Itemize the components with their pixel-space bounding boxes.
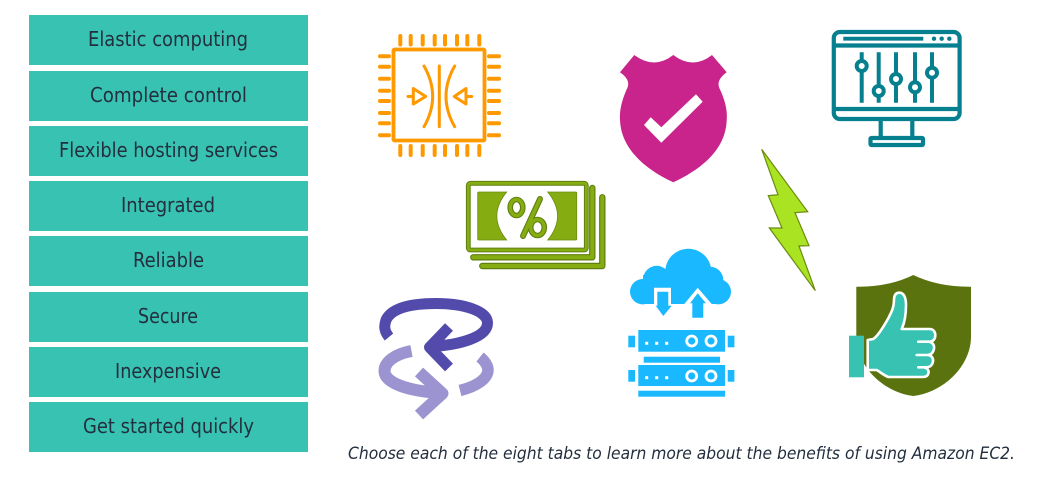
tab: Elastic computing (29, 15, 308, 65)
icon: magenta shield with check mark (620, 55, 727, 182)
cloud with arrows (630, 249, 731, 318)
icon: processor chip with inward arrows (380, 36, 499, 155)
tab: Secure: Secure (138, 304, 198, 328)
tab: Complete control (29, 71, 308, 121)
icon: lightning bolt (762, 149, 815, 291)
server rack (628, 330, 734, 397)
tab: Flexible hosting services: Flexible hosting services (59, 138, 278, 162)
tab: Get started quickly: Get started quickly (83, 414, 254, 438)
caption: Choose each of the eight tabs to learn more about the benefits of using Amazon EC2. (348, 444, 1015, 464)
tab: Complete control: Complete control (90, 83, 247, 107)
tab: Reliable: Reliable (133, 248, 204, 272)
tab: Flexible hosting services (29, 126, 308, 176)
icon: cloud with upload and download over servers (628, 249, 734, 397)
icon: rotating arrows (384, 304, 488, 415)
tab: Inexpensive: Inexpensive (115, 359, 221, 383)
tab: Elastic computing: Elastic computing (88, 27, 248, 51)
tab: Reliable (29, 236, 308, 286)
tab: Integrated: Integrated (121, 193, 215, 217)
icon: stack of bills with percent sign (468, 183, 602, 266)
icon: thumbs up on green shield (849, 275, 971, 396)
panel: benefit tabs (29, 15, 308, 452)
icon: monitor with control sliders (834, 32, 960, 145)
tab: Secure (29, 292, 308, 342)
tab: Inexpensive (29, 347, 308, 397)
tab: Integrated (29, 181, 308, 231)
tab: Get started quickly (29, 402, 308, 452)
